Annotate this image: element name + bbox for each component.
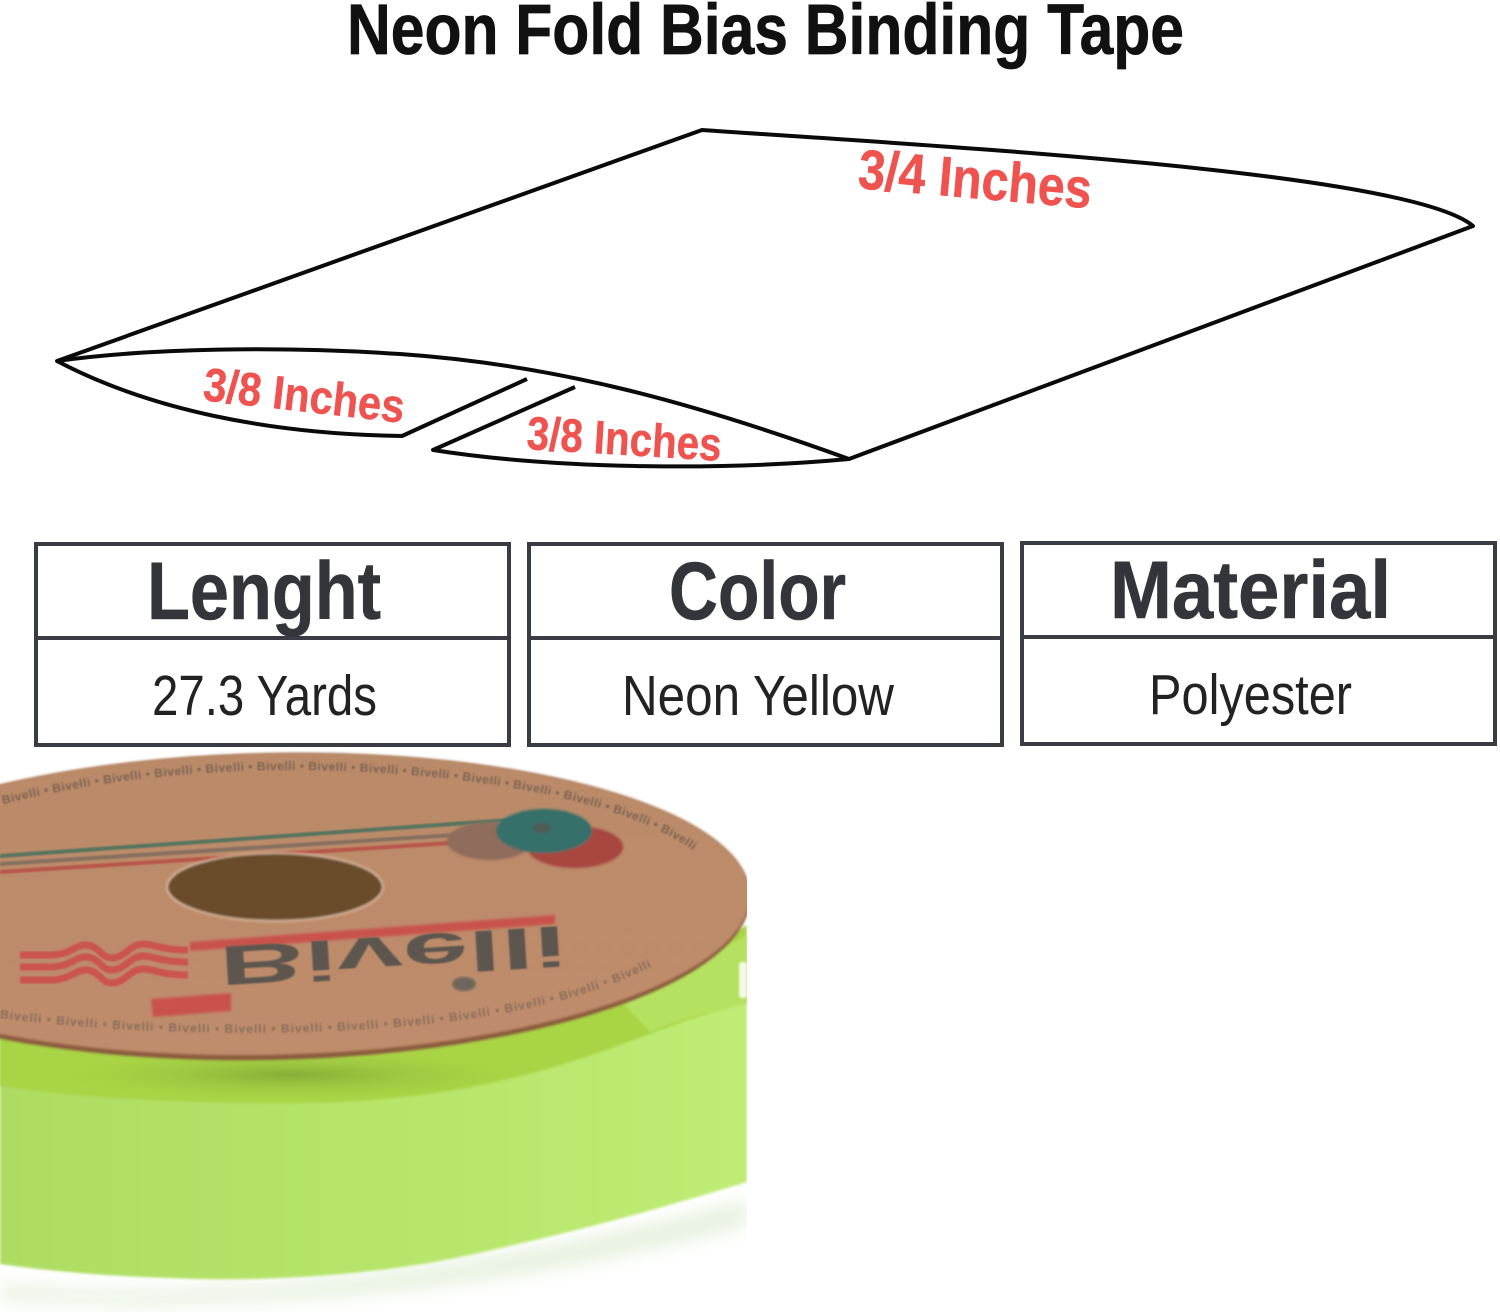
value: length: 27.3 Yards [152,664,377,728]
left fold flap [57,361,527,436]
heading: color: Color [669,546,846,637]
light strip at tape edge [620,935,747,1032]
shaded tape under disc [0,925,747,1103]
label: right 3/8 inches: 3/8 Inches [525,406,723,471]
spec card: material [1022,543,1495,744]
diagram: folded tape outline [57,130,1473,471]
right fold flap [433,387,849,466]
rim text, lower arc: Bivelli • Bivelli • Bivelli • Bivelli • Bivelli • Bivelli • Bivelli • Bivelli • Bivelli • Bivelli • Bivelli • Bivelli [0,959,651,1034]
printed brand name, vertically flipped: Bivelli [217,914,568,998]
printed logo waves [20,944,188,983]
printed logo stripe [190,915,555,951]
tape top panel outline [57,130,1473,459]
label: left 3/8 inches: 3/8 Inches [201,357,408,433]
core hole [167,853,383,921]
printed mark [452,977,476,991]
label: 3/4 inches: 3/4 Inches [856,137,1095,220]
printed stripes [0,820,510,872]
white notch [739,962,747,998]
product photo: tape roll [0,750,747,1310]
value: material: Polyester [1149,663,1352,727]
value: color: Neon Yellow [622,664,895,728]
spec card: color [529,544,1002,745]
spec card: length [36,544,509,745]
heading: material: Material [1110,545,1391,636]
cardboard disc [0,750,747,1062]
dark shadow under disc [153,1060,428,1090]
printed flag [151,993,231,1017]
printed dots [447,809,623,868]
heading: length: Lenght [147,546,381,637]
tape side [0,1000,747,1279]
floor shadow [0,1200,747,1304]
